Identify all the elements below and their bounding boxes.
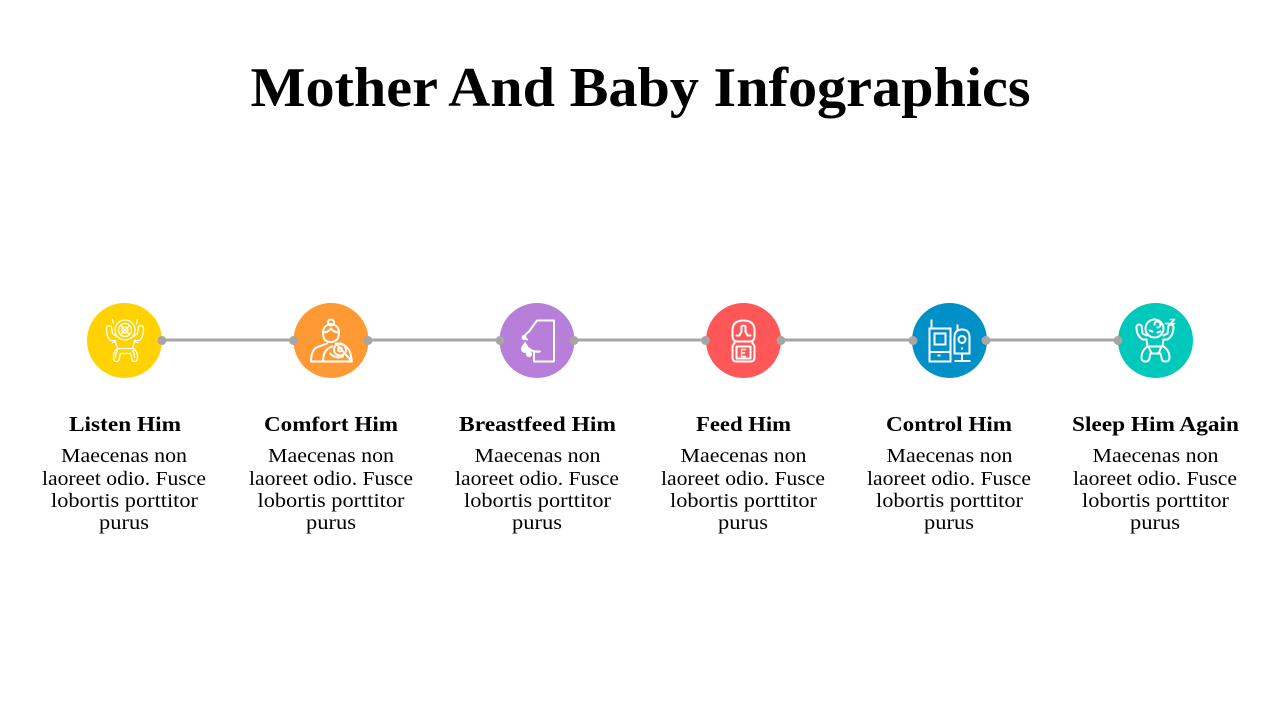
body text: purus bbox=[99, 512, 149, 534]
body text: Maecenas non bbox=[886, 445, 1012, 467]
body text: laoreet odio. Fusce bbox=[455, 468, 619, 490]
body text: Maecenas non bbox=[680, 445, 806, 467]
body text: lobortis porttitor bbox=[670, 490, 817, 512]
timeline connector bbox=[162, 338, 1118, 342]
icon: baby monitor bbox=[912, 303, 987, 378]
step 2: comfort him bbox=[249, 303, 413, 534]
body text: Maecenas non bbox=[61, 445, 187, 467]
step 6: sleep him again bbox=[1072, 303, 1239, 534]
body text: Maecenas non bbox=[1092, 445, 1218, 467]
body text: purus bbox=[718, 512, 768, 534]
body text bbox=[867, 445, 1031, 534]
icon: breast with milk drops bbox=[500, 303, 574, 378]
body text: laoreet odio. Fusce bbox=[42, 468, 206, 490]
body text: lobortis porttitor bbox=[1082, 490, 1229, 512]
step 1: listen him bbox=[42, 303, 206, 534]
body text bbox=[1073, 445, 1237, 534]
body text: purus bbox=[306, 512, 356, 534]
step 4: feed him bbox=[661, 303, 825, 534]
step 3: breastfeed him bbox=[455, 303, 619, 534]
body text: Maecenas non bbox=[474, 445, 600, 467]
body text: purus bbox=[1130, 512, 1180, 534]
body text: lobortis porttitor bbox=[51, 490, 198, 512]
heading: Sleep Him Again bbox=[1072, 412, 1239, 436]
heading: Feed Him bbox=[696, 412, 791, 436]
body text: lobortis porttitor bbox=[464, 490, 611, 512]
body text: Maecenas non bbox=[268, 445, 394, 467]
body text: purus bbox=[924, 512, 974, 534]
body text: laoreet odio. Fusce bbox=[1073, 468, 1237, 490]
body text: purus bbox=[512, 512, 562, 534]
step 5: control him bbox=[867, 303, 1031, 534]
body text: laoreet odio. Fusce bbox=[661, 468, 825, 490]
body text: lobortis porttitor bbox=[876, 490, 1023, 512]
body text bbox=[455, 445, 619, 534]
connector dots bbox=[158, 336, 1122, 345]
heading: Breastfeed Him bbox=[459, 412, 616, 436]
icon: baby bottle bbox=[706, 303, 781, 378]
body text: laoreet odio. Fusce bbox=[867, 468, 1031, 490]
heading: Listen Him bbox=[69, 412, 181, 436]
title: Mother And Baby Infographics bbox=[250, 57, 1030, 119]
body text bbox=[661, 445, 825, 534]
icon: mother holding baby bbox=[294, 303, 368, 378]
body text: laoreet odio. Fusce bbox=[249, 468, 413, 490]
body text: lobortis porttitor bbox=[258, 490, 405, 512]
icon: sleeping baby bbox=[1118, 303, 1193, 378]
icon: crying baby bbox=[87, 303, 162, 378]
body text bbox=[42, 445, 206, 534]
body text bbox=[249, 445, 413, 534]
heading: Control Him bbox=[886, 412, 1012, 436]
heading: Comfort Him bbox=[264, 412, 398, 436]
